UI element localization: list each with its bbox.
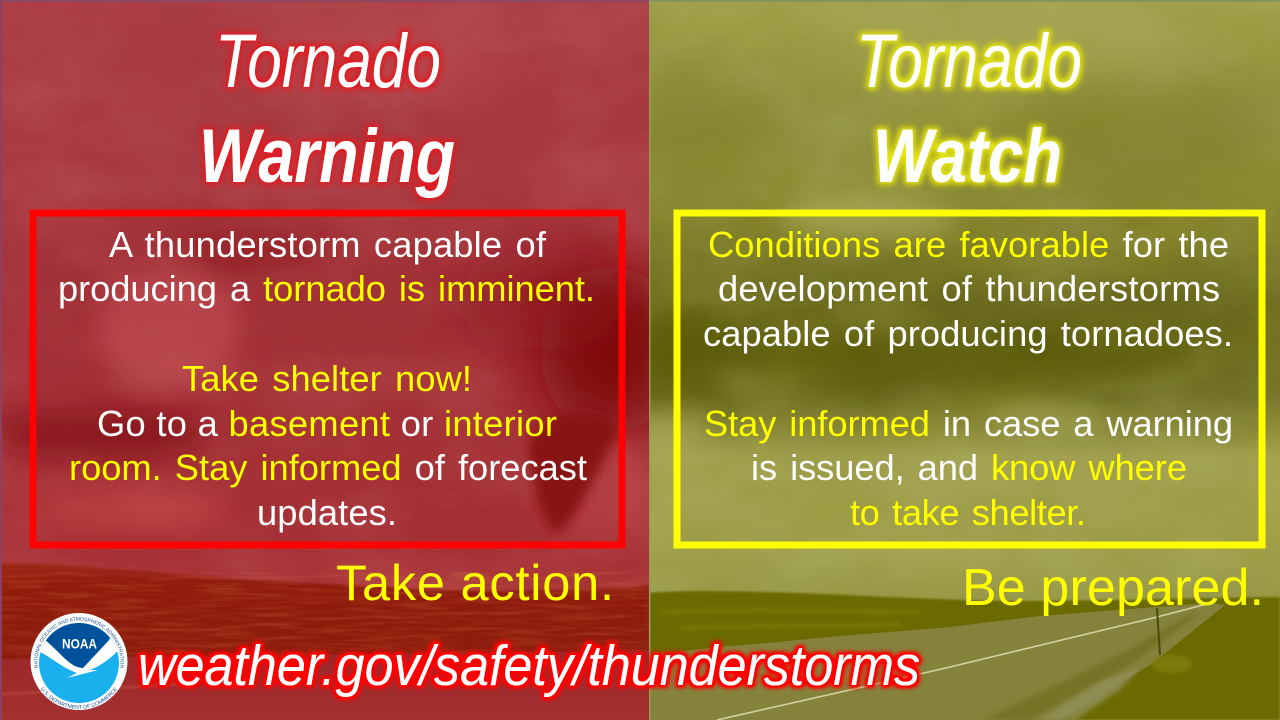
seal ring text: U.S. DEPARTMENT OF COMMERCE (41, 687, 118, 709)
warning description text: Go to a basement or interior (97, 403, 557, 444)
title: tornado warning (199, 19, 455, 199)
watch description text: to take shelter. (850, 492, 1086, 533)
tagline: be prepared: Be prepared. (962, 559, 1264, 617)
watch description text (703, 224, 1233, 533)
watch description text: Conditions are favorable for the (708, 224, 1229, 265)
warning description text: A thunderstorm capable of (109, 224, 547, 265)
NOAA wordmark: NOAA (62, 636, 97, 652)
land (2, 562, 649, 659)
watch description text: Stay informed in case a warning (704, 403, 1233, 444)
title: tornado watch: Tornado (856, 19, 1082, 104)
title: tornado watch: Watch (873, 114, 1062, 199)
road (649, 603, 1225, 720)
hills (649, 591, 1280, 720)
watch description text: capable of producing tornadoes. (703, 313, 1233, 354)
panel: watch info box (677, 213, 1262, 545)
title: tornado watch (856, 19, 1082, 199)
roadside sign post (1157, 608, 1160, 655)
tornado funnel (528, 411, 620, 532)
warning description text: room. Stay informed of forecast (69, 447, 587, 488)
icon: NOAA logo (30, 613, 128, 710)
title: tornado warning: Warning (199, 114, 455, 199)
warning description text: updates. (257, 492, 397, 533)
website link text: weather.gov/safety/thunderstorms (138, 634, 920, 698)
panel: warning info box (33, 213, 622, 545)
watch description text: is issued, and know where (751, 447, 1187, 488)
panel: tornado warning background (0, 0, 680, 720)
warning description text (58, 224, 595, 533)
panel: tornado watch background (620, 0, 1280, 720)
watch description text: development of thunderstorms (718, 268, 1220, 309)
warning description text: Take shelter now! (182, 358, 472, 399)
seal ring text (34, 617, 124, 709)
title: tornado warning: Tornado (215, 19, 441, 104)
seal ring text: NATIONAL OCEANIC AND ATMOSPHERIC ADMINISTRATION (34, 617, 124, 668)
tagline: take action: Take action. (336, 554, 614, 611)
warning description text: producing a tornado is imminent. (58, 268, 595, 309)
